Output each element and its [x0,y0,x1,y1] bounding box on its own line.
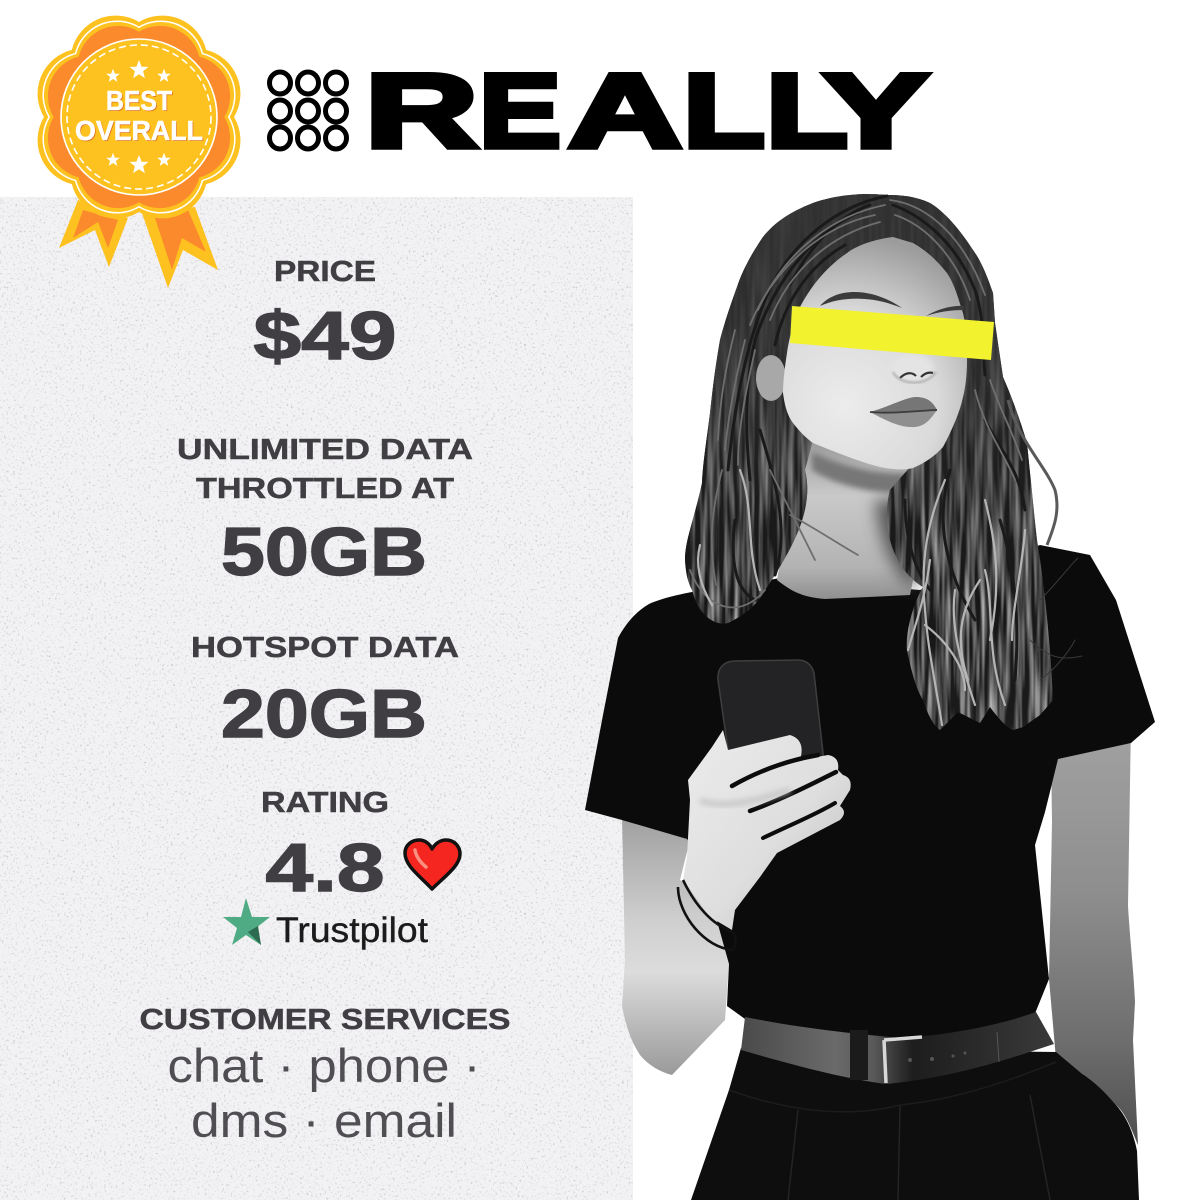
text: unlimited data: THROTTLED AT [196,473,454,505]
pants [691,1048,1139,1200]
logo: REALLY wordmark: R [365,53,478,170]
neck [777,440,935,599]
eyebrows [820,292,964,316]
bracelets [678,880,736,950]
panel: plan details [0,197,633,1200]
logo: REALLY wordmark: E [479,53,561,170]
nose [891,354,936,383]
hair wisp [1008,400,1057,545]
lips [870,397,937,427]
text: customer services: dms · email [191,1094,457,1147]
logo: nine-circle mark [270,72,346,149]
scalloped rosette [38,16,240,218]
badge text: BEST [106,85,172,116]
text: customer services: CUSTOMER SERVICES [140,1004,510,1036]
text: rating: 4.8 [266,830,384,906]
shirt [585,545,1155,1042]
text: hotspot data [191,632,459,752]
left arm [622,818,741,1075]
text: customer services [140,1004,510,1147]
text: rating: RATING [261,787,389,819]
badge text: OVERALL [75,115,203,146]
right arm [1049,722,1138,1145]
ear [756,355,786,401]
right ribbon [142,207,218,288]
badge stars [106,60,171,173]
logo: REALLY wordmark: L [683,53,765,170]
text: price: $49 [254,298,396,374]
text: hotspot data: 20GB [221,676,427,752]
logo: REALLY wordmark: A [568,53,682,170]
logo: REALLY wordmark: L [766,53,848,170]
yellow censor bar [790,306,994,360]
badge text: OVERALL [76,116,204,147]
hand [683,730,851,930]
icon: red heart [405,840,460,889]
badge text [75,85,204,147]
phone [718,660,826,835]
text: rating [261,787,389,906]
hair strands [690,196,1082,725]
text: unlimited data: 50GB [221,514,427,590]
face [783,237,967,469]
text: customer services: chat · phone · [168,1039,480,1092]
text: unlimited data: UNLIMITED DATA [177,434,473,466]
text: hotspot data: HOTSPOT DATA [191,632,459,664]
left ribbon [59,200,128,267]
hair [680,190,1100,740]
text: Trustpilot: Trustpilot [276,911,428,950]
icon: Trustpilot star [223,898,270,945]
text: unlimited data [177,434,473,590]
badge text: BEST [107,86,173,117]
text: price: PRICE [274,256,376,288]
belt [741,1012,1054,1084]
logo: REALLY wordmark: Y [823,53,929,170]
text: price [254,256,396,374]
illustration: woman holding a phone [585,190,1155,1200]
badge: best overall rosette [38,16,240,288]
